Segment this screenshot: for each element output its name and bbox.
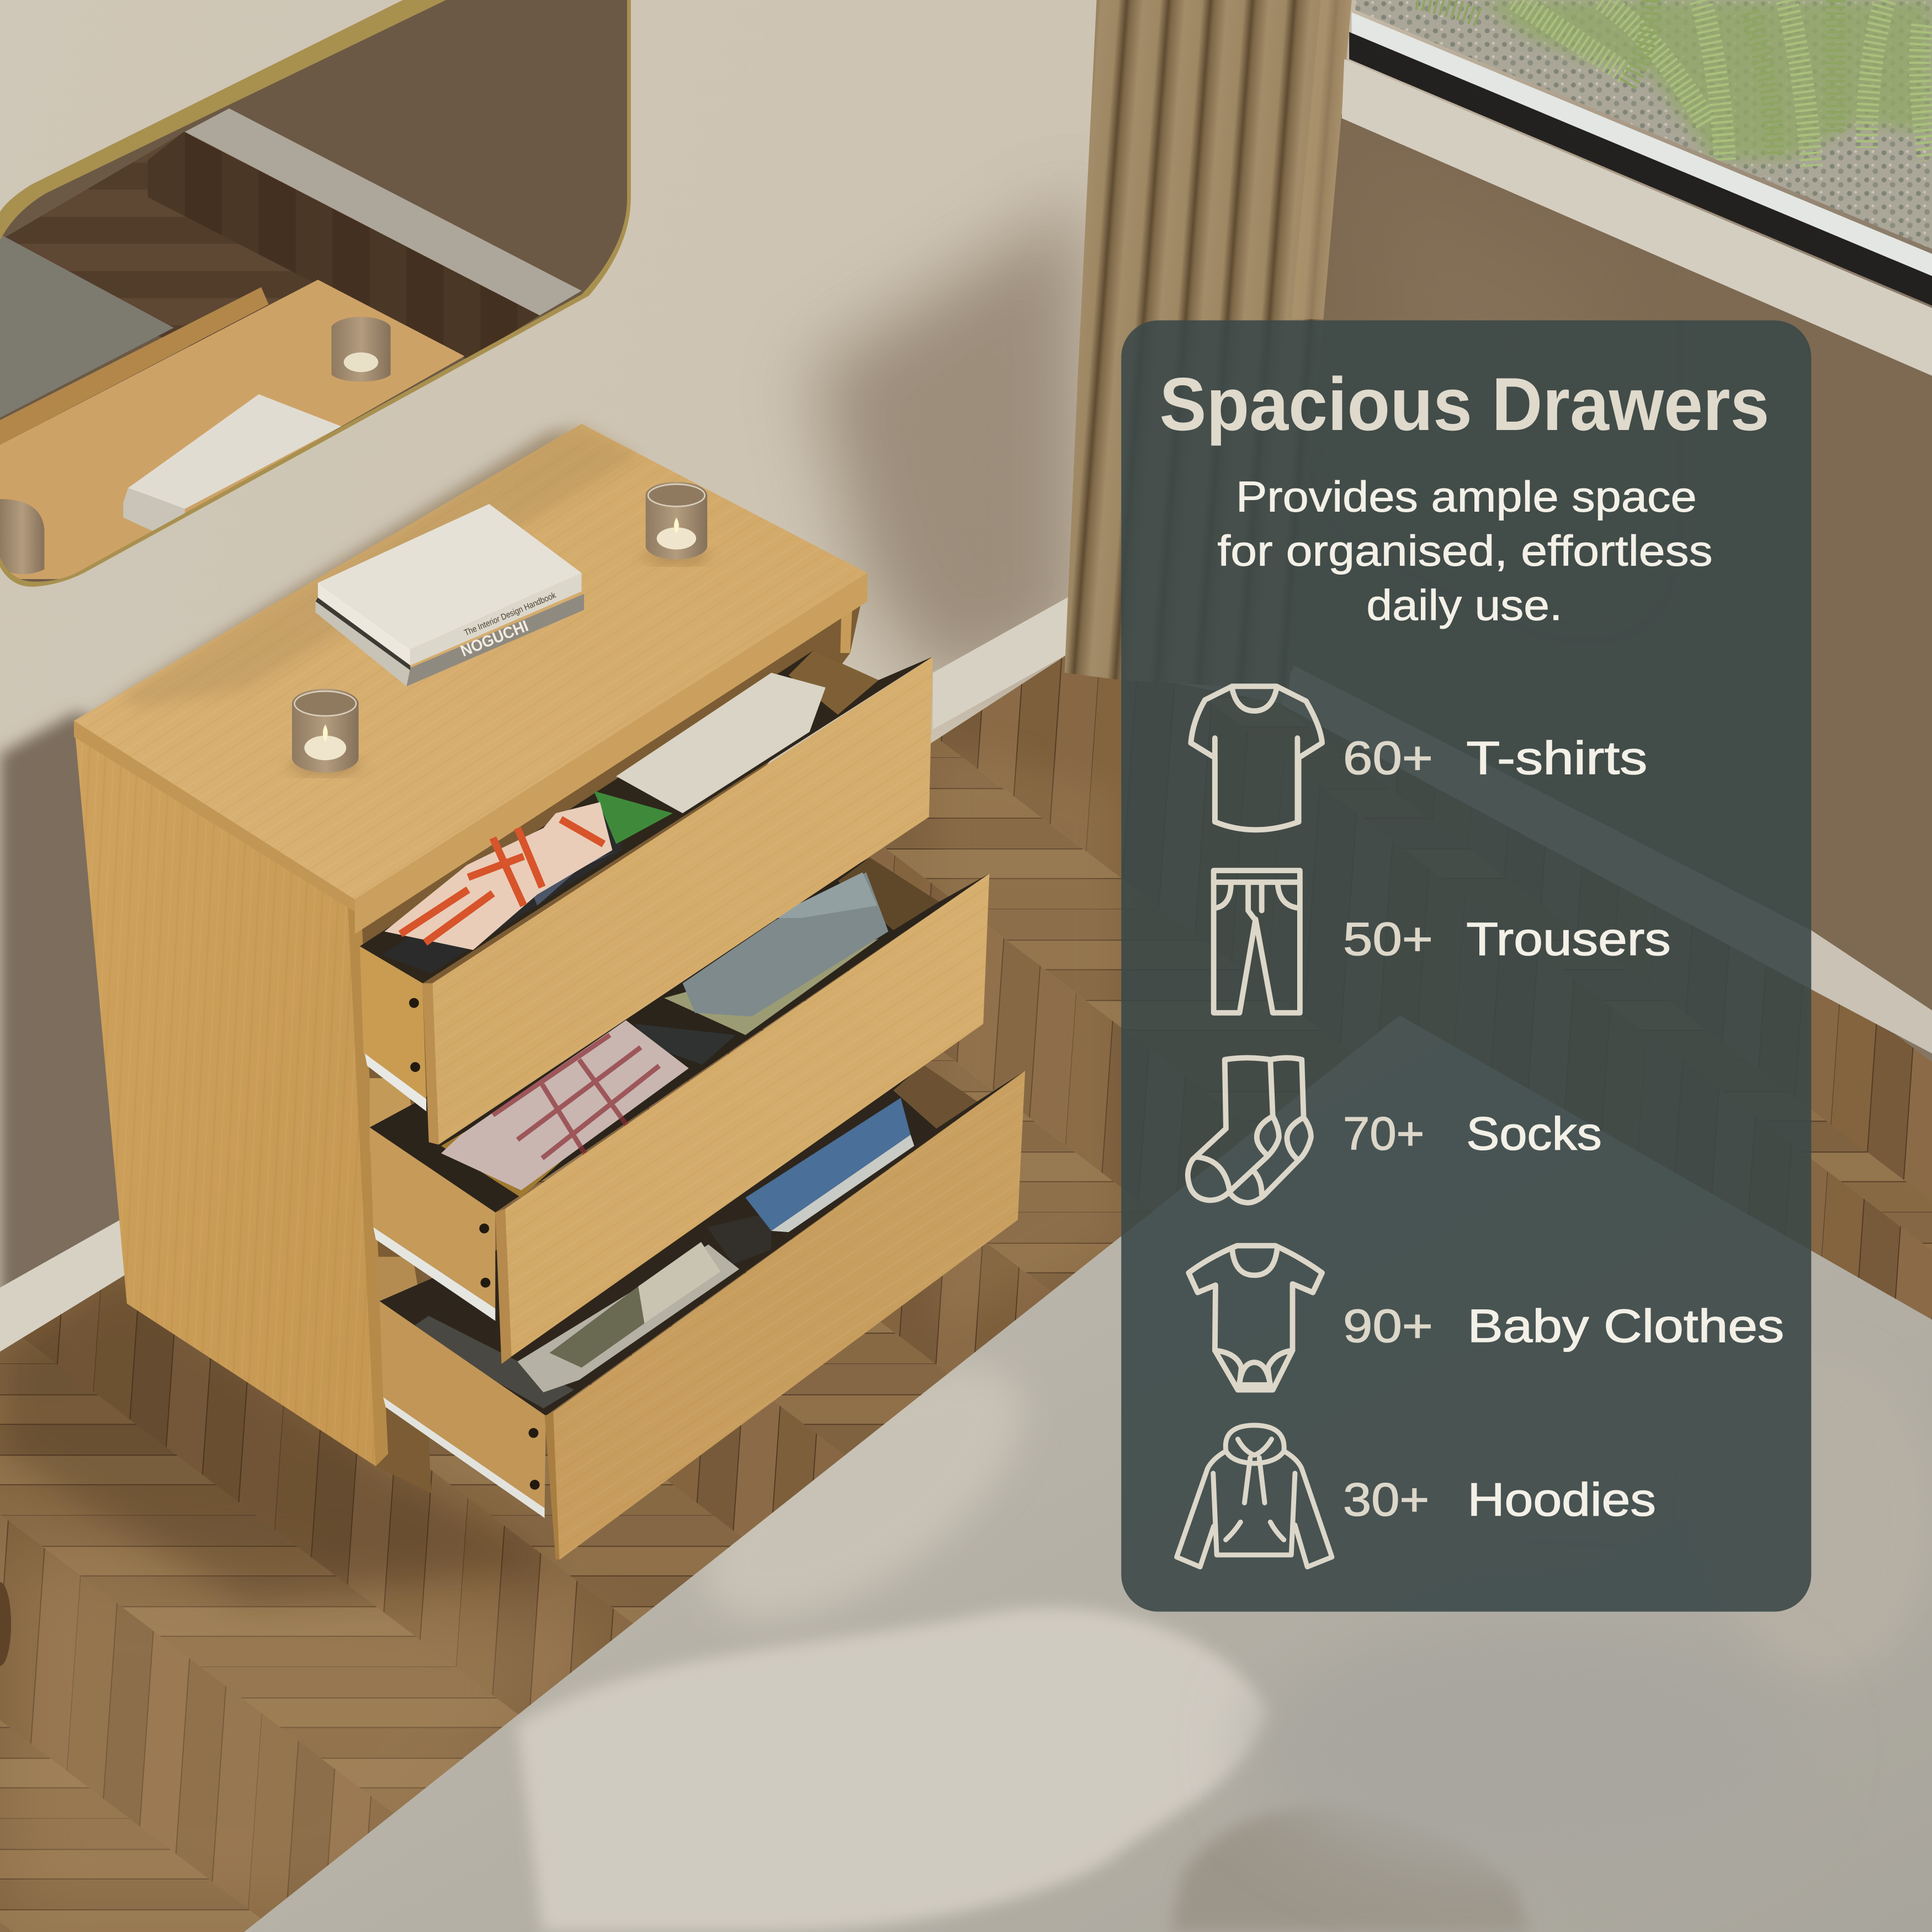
top panel [74, 424, 867, 934]
floor-length curtain [1065, 0, 1352, 690]
row: baby clothes: 90+ [1343, 1299, 1433, 1352]
row: socks: 70+ [1343, 1107, 1424, 1160]
icon: hoodie [1177, 1425, 1332, 1567]
book stack: NOGUCHI [458, 617, 531, 660]
icon: baby bodysuit [1188, 1246, 1322, 1390]
icon: trousers [1214, 871, 1300, 1013]
row: t-shirts: T-shirts [1466, 731, 1647, 784]
book stack: The Interior Design Handbook [463, 591, 558, 638]
baseboards [0, 596, 1932, 1352]
drawer 3 (bottom) [380, 1065, 1025, 1560]
candle front [288, 689, 362, 774]
row: baby clothes: Baby Clothes [1467, 1299, 1784, 1352]
description: for organised, effortless [1217, 527, 1713, 575]
icon: socks [1188, 1058, 1311, 1203]
row: baby clothes [1343, 1299, 1784, 1352]
row: socks: Socks [1466, 1107, 1602, 1160]
description: Provides ample space [1236, 472, 1697, 521]
side panel [74, 721, 376, 1466]
small bronze stand at floor edge [0, 1582, 11, 1666]
row: hoodies: Hoodies [1467, 1473, 1656, 1526]
drawer 1 (top) [360, 651, 933, 1145]
row: t-shirts [1343, 731, 1647, 784]
info panel [1121, 320, 1811, 1612]
row: t-shirts: 60+ [1343, 731, 1433, 784]
description: daily use. [1366, 581, 1562, 629]
heading: Spacious Drawers [1159, 362, 1769, 446]
description [1217, 472, 1713, 629]
candle back [643, 482, 710, 563]
wall mirror with reflection [0, 0, 641, 591]
carcass recess [351, 573, 867, 1493]
background wall [0, 0, 1932, 1355]
row: trousers [1343, 912, 1671, 965]
chest of drawers [74, 424, 1025, 1560]
wooden herringbone floor [0, 656, 1932, 1932]
row: socks [1343, 1107, 1602, 1160]
front stiles [347, 899, 388, 1466]
drawer 2 (middle) [370, 858, 989, 1364]
row: hoodies: 30+ [1343, 1473, 1429, 1526]
row: trousers: Trousers [1466, 912, 1671, 965]
row: hoodies [1343, 1473, 1656, 1526]
window and garden view [1342, 0, 1932, 376]
row: trousers: 50+ [1343, 912, 1433, 965]
book stack [315, 504, 584, 686]
right wall [1281, 99, 1932, 1023]
rug [244, 1015, 1932, 1932]
icon: t-shirt [1191, 686, 1322, 830]
